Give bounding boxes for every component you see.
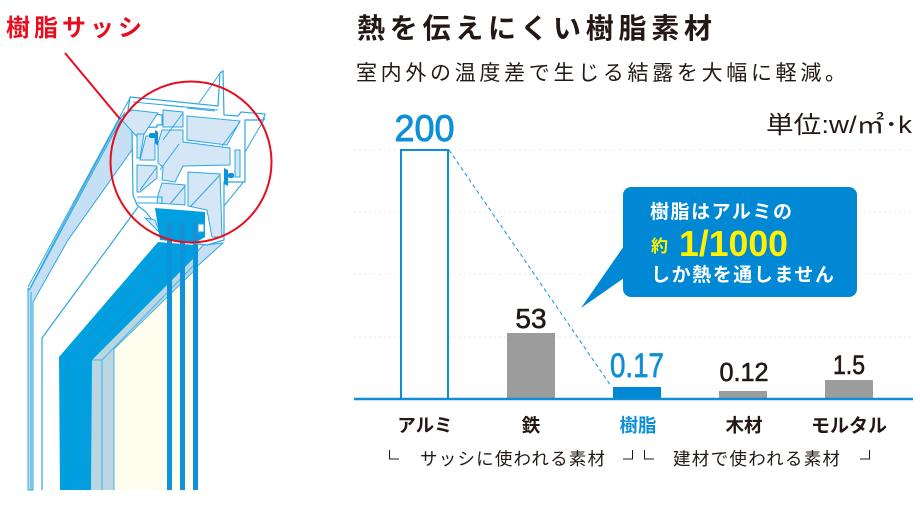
- bar chart: [354, 108, 913, 437]
- category: mortar: モルタル: [811, 415, 887, 437]
- group label: building materials: 建材で使われる素材: [673, 449, 840, 469]
- value: 1.5: 1.5: [833, 350, 865, 380]
- group label: sash materials: サッシに使われる素材: [420, 449, 605, 469]
- value: 53: 53: [515, 303, 547, 334]
- blue glass edge: [59, 242, 195, 490]
- label: resin sash: 樹脂サッシ: [6, 15, 142, 42]
- value: 0.17: 0.17: [610, 347, 664, 385]
- bar: mortar: [825, 380, 873, 399]
- left frame strip: [28, 98, 158, 490]
- category: iron: 鉄: [522, 415, 541, 436]
- profile chambers: [120, 110, 240, 237]
- value: 0.12: 0.12: [720, 357, 768, 387]
- heading: 熱を伝えにくい樹脂素材: [357, 13, 712, 44]
- vertical blue glass panes: [167, 238, 198, 490]
- category: aluminium: アルミ: [397, 415, 453, 436]
- callout: [581, 187, 857, 308]
- axis baseline: [354, 398, 913, 400]
- blue gaskets: [149, 130, 234, 186]
- glass top pane marks: [167, 222, 198, 242]
- red highlight circle: [110, 82, 272, 242]
- red leader line: [65, 53, 120, 119]
- spacer lines: [91, 264, 195, 490]
- glass edge lines: [67, 243, 188, 490]
- bar: wood: [719, 391, 767, 399]
- spacer band: [91, 257, 195, 490]
- bar: resin: [613, 387, 661, 399]
- callout: 約: [651, 237, 668, 256]
- lower right frame band: [193, 243, 223, 270]
- callout: 樹脂はアルミの: [650, 201, 792, 223]
- subheading: 室内外の温度差で生じる結露を大幅に軽減。: [356, 62, 846, 85]
- category: resin: 樹脂: [619, 415, 657, 436]
- value: 200: 200: [394, 108, 454, 149]
- bottom bead: [198, 224, 204, 232]
- illustration: resin sash window cross-section: [28, 53, 272, 490]
- blue glass top in sash: [155, 208, 205, 243]
- cream glass pane: [114, 262, 193, 490]
- bar: iron: [507, 333, 555, 399]
- callout: 1/1000: [679, 223, 788, 264]
- inner frame line: [42, 207, 138, 490]
- sash profile outline: [128, 71, 265, 245]
- profile thin walls: [133, 102, 240, 207]
- dashed comparison line: [449, 150, 611, 386]
- far frame diagonals: [199, 72, 265, 206]
- category: wood: 木材: [725, 415, 763, 436]
- unit label: 単位:w/㎡･k: [766, 112, 913, 139]
- bar: aluminium: [401, 150, 448, 399]
- callout: しか熱を通しません: [651, 264, 834, 286]
